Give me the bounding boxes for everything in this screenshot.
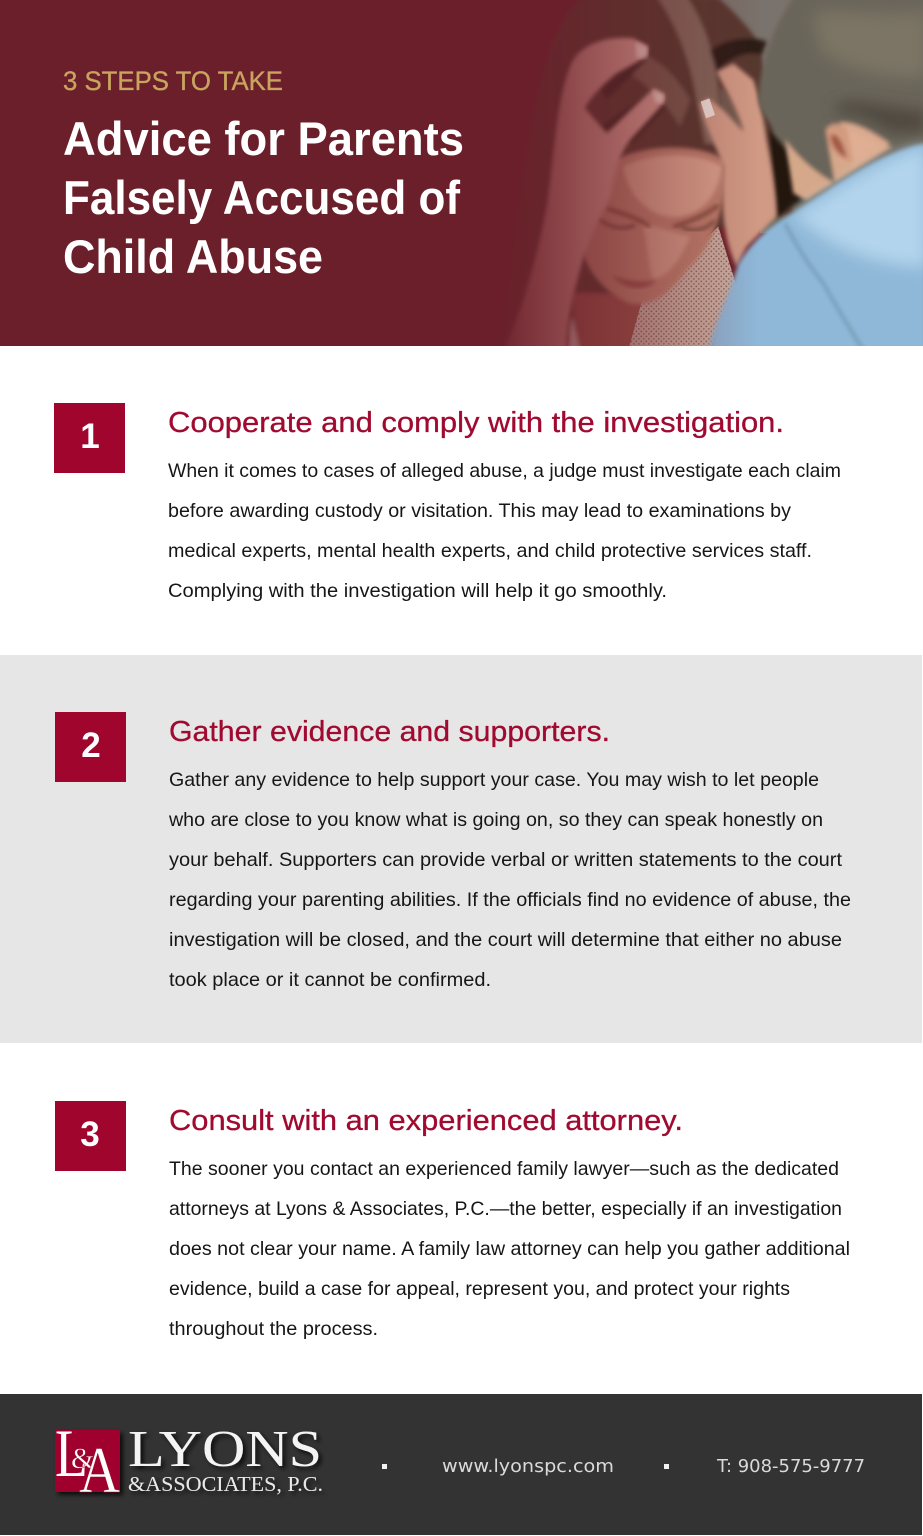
step 3 body text <box>169 1158 850 1340</box>
step 2 body text: your behalf. Supporters can provide verbal or written statements to the court <box>169 849 843 871</box>
step 1 number badge: 1 <box>80 417 100 456</box>
step 3 number badge: 3 <box>80 1115 100 1154</box>
step 2 number badge: 2 <box>81 726 101 765</box>
header banner <box>0 0 923 350</box>
step 1 body text: medical experts, mental health experts, and child protective services staff. <box>168 540 812 562</box>
dress <box>628 227 737 350</box>
step 1 heading: Cooperate and comply with the investigation. <box>168 407 784 439</box>
step 3 body text: The sooner you contact an experienced family lawyer—such as the dedicated <box>169 1158 839 1180</box>
step 1 body text: before awarding custody or visitation. This may lead to examinations by <box>168 500 791 522</box>
main title: Falsely Accused of <box>63 171 460 224</box>
step 2 body text: regarding your parenting abilities. If the officials find no evidence of abuse, the <box>169 889 851 911</box>
panel: step 1 <box>54 403 841 602</box>
step 3 number badge <box>55 1101 126 1171</box>
step 2 background band <box>0 655 922 1043</box>
logo wordmark: LYONS <box>128 1421 322 1478</box>
eyebrow: 3 steps to take: 3 STEPS TO TAKE <box>63 66 283 96</box>
logo mark: L <box>55 1415 88 1491</box>
step 3 body text: does not clear your name. A family law attorney can help you gather additional <box>169 1238 850 1260</box>
step 3 body text: evidence, build a case for appeal, represent you, and protect your rights <box>169 1278 790 1300</box>
step 3 body text: throughout the process. <box>169 1318 378 1340</box>
header photo: distressed woman and man <box>500 0 923 350</box>
bullet separator <box>664 1464 669 1469</box>
phone: T: 908-575-9777 <box>716 1457 865 1477</box>
step 3 body text: attorneys at Lyons & Associates, P.C.—the better, especially if an investigation <box>169 1198 842 1220</box>
panel: step 3 <box>55 1101 850 1340</box>
maroon gradient overlay <box>490 0 760 346</box>
logo mark: A <box>79 1434 120 1507</box>
logo wordmark <box>128 1421 323 1496</box>
step 2 heading: Gather evidence and supporters. <box>169 716 610 748</box>
bullet separator <box>382 1464 387 1469</box>
footer <box>0 1394 922 1535</box>
logo mark <box>55 1415 120 1507</box>
footer background <box>0 1394 922 1535</box>
step 1 body text: Complying with the investigation will help it go smoothly. <box>168 580 667 602</box>
step 2 body text: who are close to you know what is going on, so they can speak honestly on <box>168 809 823 831</box>
main title <box>63 112 464 283</box>
step 2 body text: Gather any evidence to help support your case. You may wish to let people <box>169 769 819 791</box>
main title: Advice for Parents <box>63 112 464 165</box>
logo: Lyons & Associates <box>55 1415 323 1507</box>
panel: step 2 <box>0 655 922 1043</box>
main title: Child Abuse <box>63 230 323 283</box>
step 2 number badge <box>55 712 126 782</box>
step 1 body text <box>168 460 841 602</box>
step 1 body text: When it comes to cases of alleged abuse, a judge must investigate each claim <box>168 460 841 482</box>
right hand <box>700 63 777 267</box>
step 3 heading: Consult with an experienced attorney. <box>169 1105 683 1137</box>
step 2 body text <box>168 769 851 991</box>
left hand and arm <box>503 38 665 350</box>
step 1 number badge <box>54 403 125 473</box>
step 2 body text: took place or it cannot be confirmed. <box>169 969 491 991</box>
website: www.lyonspc.com <box>442 1457 614 1477</box>
logo mark: & <box>71 1442 94 1475</box>
step 2 body text: investigation will be closed, and the court will determine that either no abuse <box>169 929 842 951</box>
logo wordmark: &ASSOCIATES, P.C. <box>128 1472 323 1496</box>
